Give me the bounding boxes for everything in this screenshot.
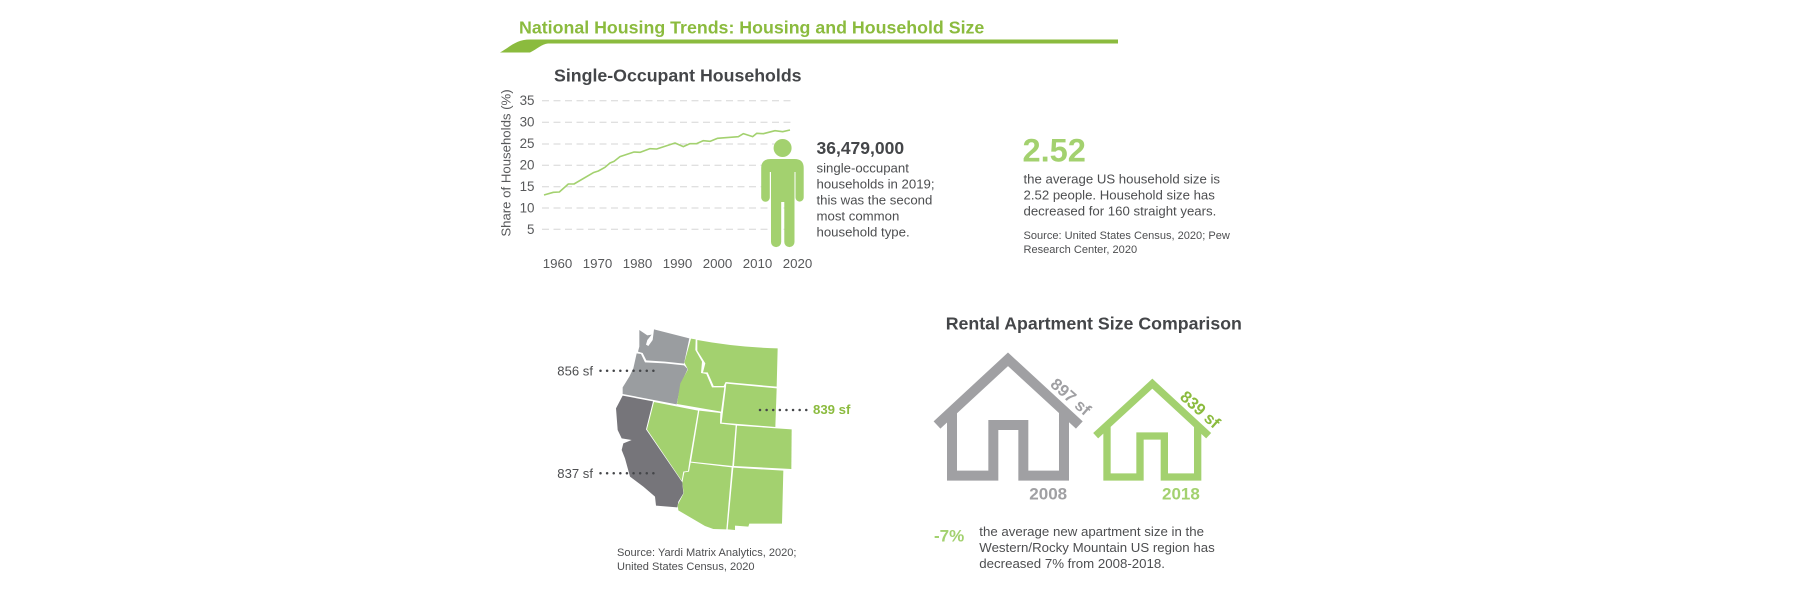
callout: 837 sf: 837 sf	[557, 466, 593, 481]
heading: single-occupant households: Single-Occupant Households	[554, 66, 802, 86]
y-axis tick labels: 30	[520, 115, 534, 130]
x-axis tick labels: 1990	[663, 256, 692, 271]
callout: 839 sf: 839 sf	[813, 402, 851, 417]
text: apartment size description: the average new apartment size in the	[979, 524, 1204, 539]
state: New Mexico	[728, 468, 783, 530]
text: household size description: 2.52 people. Household size has	[1024, 187, 1215, 202]
callout: 856 sf	[557, 363, 654, 378]
callout: 839 sf	[760, 402, 851, 417]
text: single-occupant description: households in 2019;	[816, 177, 935, 192]
data line	[544, 130, 790, 195]
y-axis tick labels: 20	[520, 158, 534, 173]
text: apartment size description: Western/Rocky Mountain US region has	[979, 540, 1215, 555]
panel: single-occupant households	[498, 66, 938, 271]
text: single-occupant description: most common	[816, 209, 899, 224]
text: single-occupant description: single-occupant	[816, 161, 909, 176]
y-axis tick labels: 10	[520, 200, 534, 216]
source: map: Source: Yardi Matrix Analytics, 2020;	[617, 547, 796, 559]
stat: 2.52: 2.52	[1022, 132, 1086, 169]
state: Utah	[691, 411, 736, 466]
y-axis tick labels: 15	[520, 179, 534, 194]
icon: 2018 house	[1096, 384, 1209, 477]
text: single-occupant description: this was the second	[816, 193, 932, 208]
callout: 856 sf: 856 sf	[557, 363, 593, 378]
text: household size description: the average US household size is	[1024, 171, 1220, 186]
state: California	[616, 396, 683, 507]
y-axis tick labels: 35	[520, 93, 534, 108]
panel: average household size	[1022, 132, 1233, 256]
x-axis tick labels: 1960	[543, 256, 572, 271]
x-axis tick labels: 2020	[783, 256, 812, 271]
label: 2008: 2008	[1029, 484, 1067, 503]
x-axis tick labels: 2010	[743, 256, 772, 271]
state: Idaho	[677, 339, 724, 412]
y-axis tick labels	[520, 93, 534, 237]
source: household size: Source: United States Census, 2020; Pew	[1024, 230, 1230, 242]
text: single-occupant description: household type.	[816, 225, 910, 240]
text: household size description: decreased for 160 straight years.	[1024, 203, 1216, 218]
source: map: United States Census, 2020	[617, 561, 755, 573]
state: Washington	[638, 329, 689, 364]
stat: 36,479,000: 36,479,000	[816, 138, 904, 158]
stat: -7%: -7%	[934, 527, 964, 546]
label: 839 sf rotated: 839 sf	[1176, 388, 1224, 433]
y-axis tick labels: 5	[527, 222, 534, 237]
title banner	[500, 18, 1118, 52]
heading: rental apartment size comparison: Rental Apartment Size Comparison	[946, 313, 1242, 333]
callout: 837 sf	[557, 466, 654, 481]
x-axis tick labels: 1980	[623, 256, 652, 271]
state: Wyoming	[722, 384, 777, 427]
title swoosh rule	[500, 40, 1118, 52]
icon: 2008 house	[937, 359, 1079, 476]
x-axis tick labels: 2000	[703, 256, 732, 271]
state: Colorado	[734, 426, 792, 469]
x-axis tick labels	[543, 256, 812, 271]
y-axis tick labels: 25	[520, 136, 534, 151]
state: Arizona	[678, 463, 732, 529]
text: apartment size description: decreased 7% from 2008-2018.	[979, 556, 1165, 571]
panel: western US map	[557, 329, 851, 573]
state: Oregon	[623, 353, 688, 404]
label: 2018: 2018	[1162, 484, 1200, 503]
state: Nevada	[647, 402, 698, 481]
title: National Housing Trends: Housing and Household Size	[519, 18, 984, 38]
source: household size: Research Center, 2020	[1024, 244, 1137, 256]
y-axis title: Share of Households (%)	[498, 89, 514, 237]
label: 897 sf: 897 sf	[1047, 375, 1094, 420]
panel: rental apartment size comparison	[934, 313, 1242, 571]
x-axis tick labels: 1970	[583, 256, 612, 271]
state: Montana	[697, 340, 778, 387]
icon: person	[761, 139, 804, 247]
map of western states	[616, 329, 792, 530]
line chart: share of households	[498, 89, 812, 271]
